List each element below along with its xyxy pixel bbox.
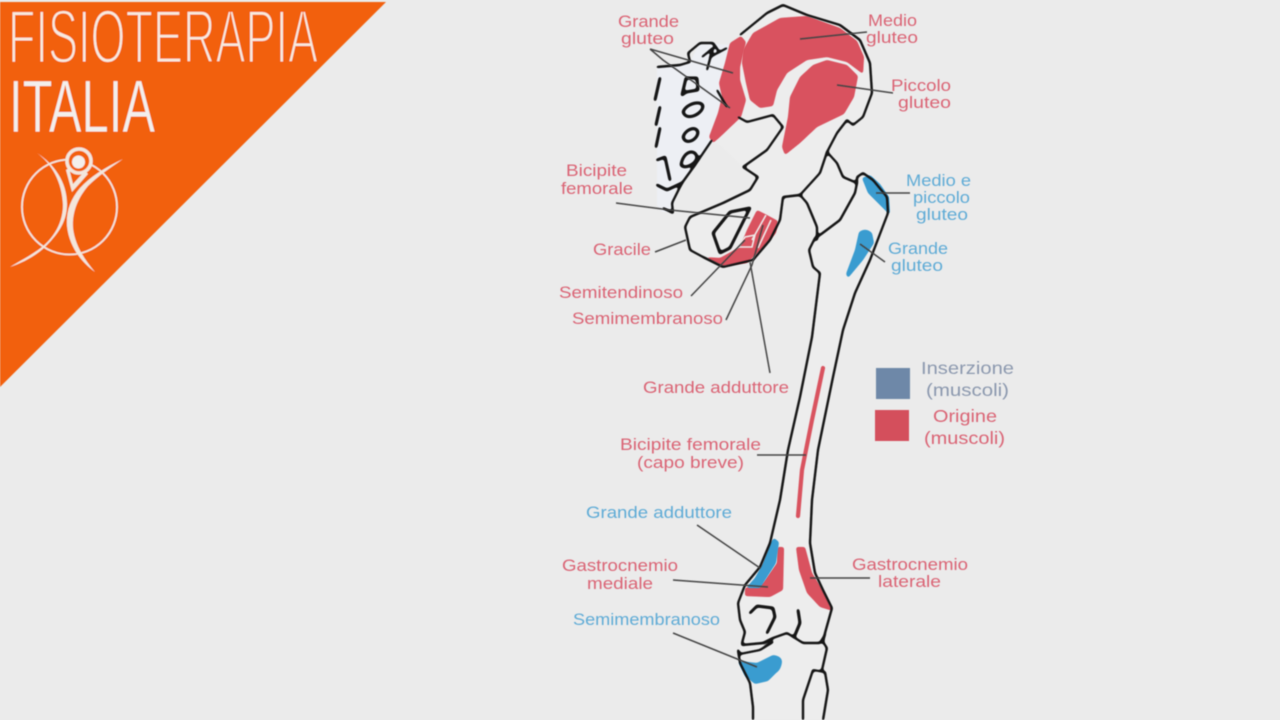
labels: origin muscles: Grande xyxy=(618,12,679,31)
labels: insertion muscles: Grande xyxy=(888,239,948,258)
muscle: grande gluteo insertion xyxy=(846,230,874,278)
labels: origin muscles: femorale xyxy=(561,179,633,198)
legend label: inserzione: Inserzione xyxy=(921,358,1014,378)
labels: origin muscles: Bicipite femorale xyxy=(620,435,761,454)
labels: origin muscles: gluteo xyxy=(621,29,674,48)
labels: insertion muscles: Semimembranoso xyxy=(573,610,720,629)
logo title: Italia: ITALIA xyxy=(9,65,155,148)
labels: origin muscles: gluteo xyxy=(898,93,951,112)
muscle: medio gluteo origin xyxy=(742,16,864,108)
legend swatch: origine xyxy=(875,410,909,441)
leader lines xyxy=(616,32,910,667)
labels: origin muscles: gluteo xyxy=(866,28,918,47)
bone outlines xyxy=(655,5,888,720)
legend xyxy=(875,358,1014,448)
panel: bone diagram xyxy=(655,5,890,720)
legend label: inserzione xyxy=(921,358,1014,400)
orange corner triangle xyxy=(0,2,386,387)
labels: insertion muscles: gluteo xyxy=(891,256,943,275)
labels: origin muscles: Gracile xyxy=(593,240,651,259)
labels: origin muscles: Medio xyxy=(868,11,917,30)
labels: insertion muscles: piccolo xyxy=(913,188,970,207)
muscle: gastrocnemio laterale origin xyxy=(796,547,833,611)
muscle: bicipite femorale breve origin xyxy=(798,368,823,516)
femur and hip bone fill xyxy=(685,5,888,720)
legend label: inserzione: (muscoli) xyxy=(926,380,1009,400)
muscle: grande gluteo origin xyxy=(709,36,746,143)
muscle: gastrocnemio mediale origin xyxy=(745,547,784,597)
legend label: origine xyxy=(924,406,1005,448)
labels: origin muscles: (capo breve) xyxy=(637,453,744,472)
sacrum xyxy=(657,43,735,212)
labels: origin muscles: Gastrocnemio xyxy=(852,555,968,574)
muscle: piccolo gluteo origin xyxy=(782,60,858,155)
legend label: origine: (muscoli) xyxy=(924,428,1005,448)
labels: origin muscles: Gastrocnemio xyxy=(562,556,678,575)
labels: origin muscles: Bicipite xyxy=(566,161,627,180)
labels: origin muscles: mediale xyxy=(587,574,653,593)
muscle: ischial origins xyxy=(704,210,778,266)
labels: origin muscles: Semitendinoso xyxy=(559,283,683,302)
labels: origin muscles: laterale xyxy=(878,572,941,591)
legend swatch: inserzione xyxy=(876,368,910,399)
muscle: grande adduttore insertion xyxy=(746,538,779,588)
icon: logo figure xyxy=(10,149,123,272)
panel: logo banner xyxy=(0,0,386,387)
labels: insertion muscles: Grande adduttore xyxy=(586,503,732,522)
muscle: semimembranoso insertion xyxy=(738,655,782,684)
labels: origin muscles: Semimembranoso xyxy=(572,309,723,328)
muscle: medio e piccolo gluteo insertion xyxy=(862,175,890,215)
labels: insertion muscles xyxy=(573,171,971,629)
labels: insertion muscles: gluteo xyxy=(916,205,968,224)
labels: insertion muscles: Medio e xyxy=(906,171,971,190)
labels: origin muscles xyxy=(559,11,968,593)
legend label: origine: Origine xyxy=(933,406,997,426)
labels: origin muscles: Grande adduttore xyxy=(643,378,789,397)
labels: origin muscles: Piccolo xyxy=(891,76,951,95)
